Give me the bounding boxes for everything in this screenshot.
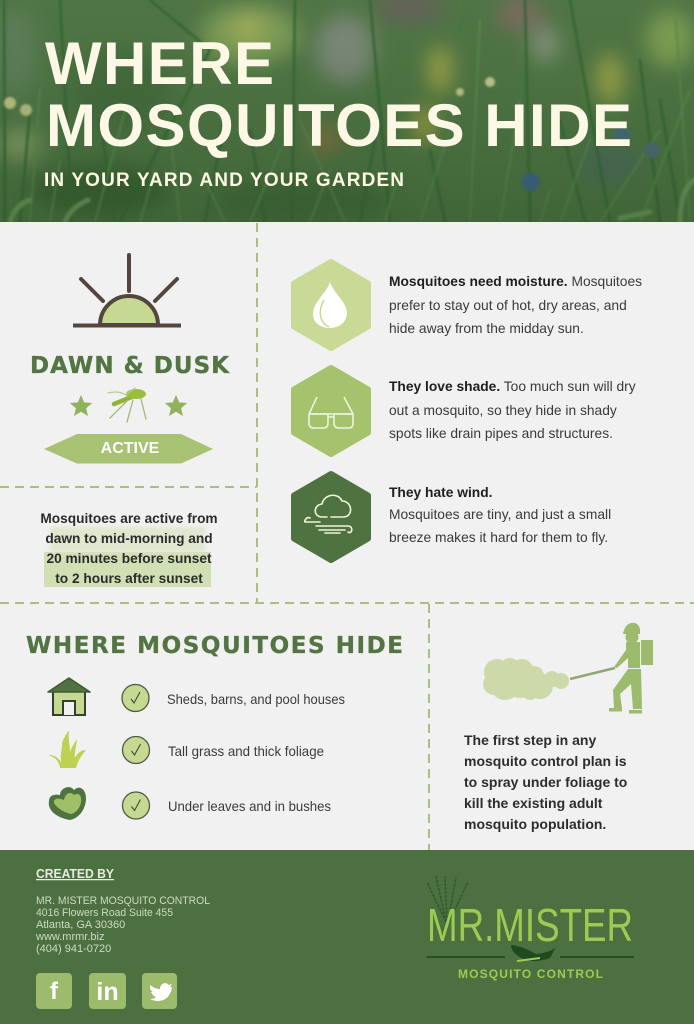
header photo: garden grass and flowers [0, 0, 694, 222]
text: activity times: Mosquitoes are active from [40, 511, 218, 526]
text: sheds: Sheds, barns, and pool houses [167, 691, 345, 707]
icon: twitter [142, 973, 177, 1009]
text: moisture: prefer to stay out of hot, dry areas, and [389, 298, 627, 313]
title [45, 30, 632, 159]
title: MOSQUITOES HIDE [46, 92, 632, 159]
logo: Mr. Mister mosquito control [427, 876, 634, 981]
icon: wind hexagon [294, 474, 368, 560]
text: shade: They love shade. Too much sun will dry [389, 379, 636, 394]
icon: check 3 [122, 792, 150, 819]
text: wind: Mosquitoes are tiny, and just a small [389, 507, 611, 522]
contact details: 4016 Flowers Road Suite 455 [36, 907, 173, 919]
created by heading: CREATED BY [36, 867, 115, 881]
text: moisture [389, 274, 642, 336]
heading: where mosquitoes hide: WHERE MOSQUITOES HIDE [26, 633, 403, 659]
text: control plan: mosquito control plan is [464, 753, 627, 769]
text: activity times: 20 minutes before sunset [46, 551, 212, 566]
grass strip behind text [44, 527, 211, 587]
icon: grass [49, 731, 86, 768]
icon: leaves [49, 787, 86, 820]
footer band [0, 850, 694, 1024]
text: control plan: The first step in any [464, 732, 596, 748]
icon: fog spray cloud [483, 658, 569, 700]
text: control plan: mosquito population. [464, 816, 606, 832]
text: leaves: Under leaves and in bushes [168, 798, 331, 814]
banner: active: ACTIVE [101, 440, 160, 457]
icon: sunrise [73, 255, 181, 326]
icon: sunglasses hexagon [294, 368, 368, 454]
logo: Mr. Mister mosquito control: MOSQUITO CONTROL [458, 967, 603, 981]
text: shade: spots like drain pipes and structures. [389, 426, 613, 441]
text: activity times: to 2 hours after sunset [55, 571, 203, 586]
icon: facebook: f [50, 978, 59, 1005]
text: wind [389, 485, 611, 545]
title: WHERE [45, 30, 274, 97]
icon: star left [70, 395, 92, 416]
text: wind: breeze makes it hard for them to fly. [389, 530, 608, 545]
icon: linkedin [89, 973, 126, 1009]
contact details: Atlanta, GA 30360 [36, 919, 125, 931]
icon: man with sprayer [570, 623, 653, 714]
text: shade: out a mosquito, so they hide in shady [389, 403, 617, 418]
subtitle: IN YOUR YARD AND YOUR GARDEN [44, 170, 404, 191]
icon: check 2 [122, 736, 150, 764]
text: control plan: to spray under foliage to [464, 774, 627, 790]
text: moisture: hide away from the midday sun. [389, 321, 584, 336]
icon: facebook [36, 973, 72, 1009]
icon: mosquito [108, 388, 146, 422]
text: grass: Tall grass and thick foliage [168, 743, 324, 759]
icon: star right [165, 395, 187, 416]
icon: moisture hexagon [294, 262, 368, 348]
icon: linkedin: in [96, 978, 119, 1006]
icon: check 1 [122, 684, 149, 712]
contact details: MR. MISTER MOSQUITO CONTROL [36, 895, 210, 907]
text: moisture: Mosquitoes need moisture. Mosquitoes [389, 274, 642, 289]
text: activity times [40, 511, 218, 587]
flowers [4, 77, 660, 191]
text: shade [389, 379, 636, 441]
text: control plan: kill the existing adult [464, 795, 603, 811]
text: activity times: dawn to mid-morning and [45, 531, 213, 546]
banner: active [44, 434, 213, 464]
heading: dawn and dusk: DAWN & DUSK [30, 353, 230, 379]
text: wind: They hate wind. [389, 485, 492, 500]
contact details: (404) 941-0720 [36, 943, 111, 955]
text: control plan [464, 732, 627, 832]
logo: Mr. Mister mosquito control: MR.MISTER [427, 899, 633, 951]
contact details: www.mrmr.biz [35, 931, 104, 943]
contact details [35, 895, 210, 955]
icon: shed [48, 678, 90, 715]
